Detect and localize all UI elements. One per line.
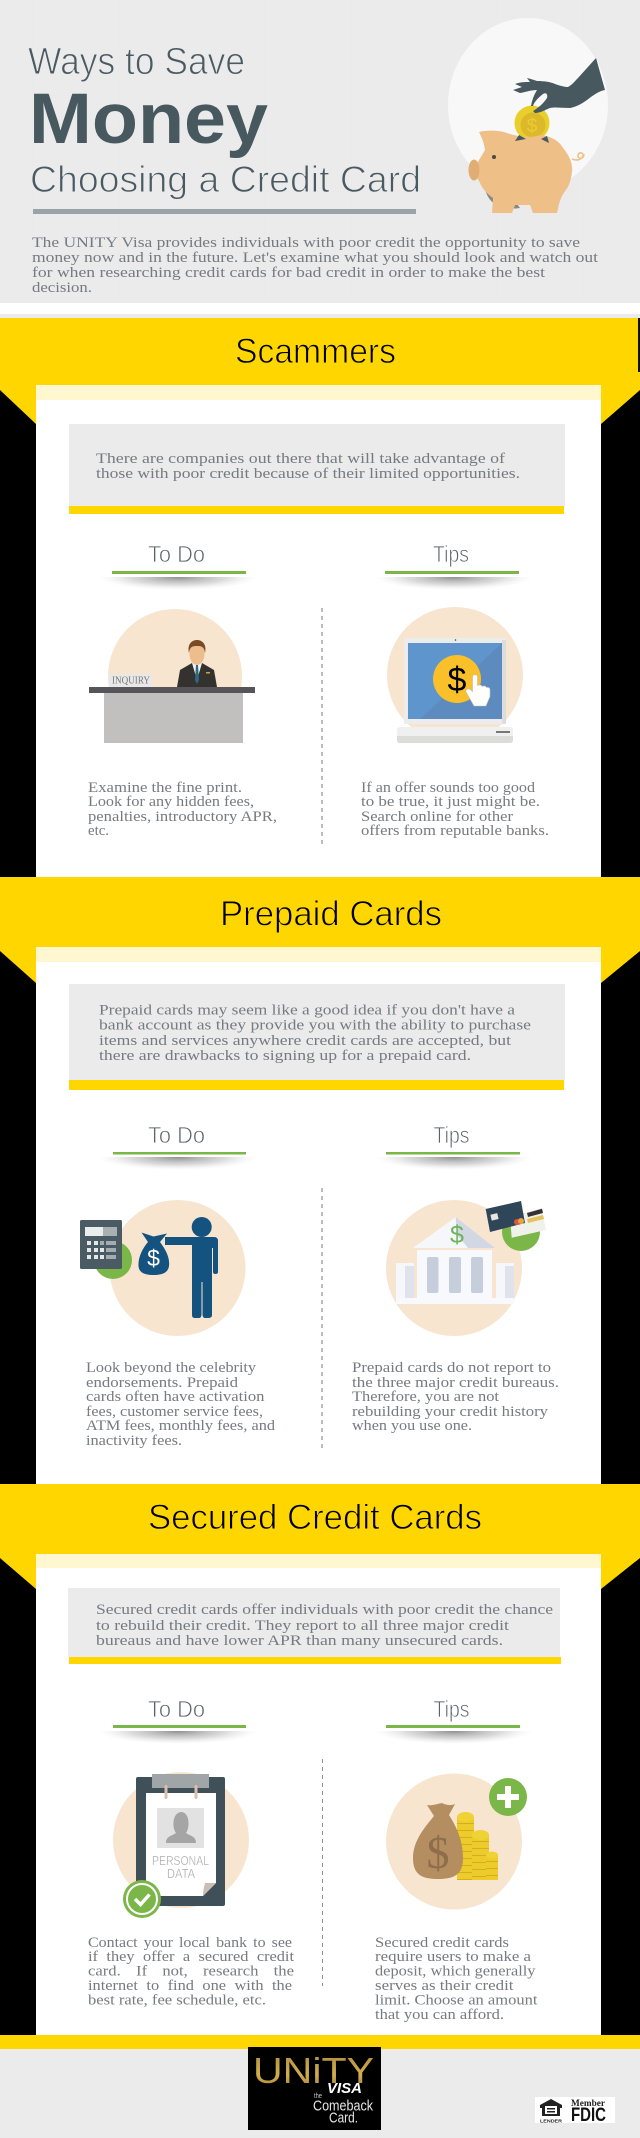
callout box [68, 1588, 561, 1664]
heading: To Do [98, 1696, 258, 1744]
section: Prepaid Cards [0, 877, 640, 1484]
icon: receptionist at inquiry desk: INQUIRY [112, 676, 150, 686]
callout box: There are companies out there that will take advantage of [96, 451, 505, 467]
text: To Do: card. If not, research the [88, 1964, 294, 1980]
title [28, 41, 421, 200]
text: Tips: serves as their credit [375, 1978, 514, 1994]
callout box: there are drawbacks to signing up for a prepaid card. [99, 1048, 471, 1064]
text: Tips [361, 780, 549, 839]
content card [36, 947, 601, 1484]
heading: Tips [375, 541, 533, 590]
text: To Do: endorsements. Prepaid [86, 1375, 239, 1391]
text: Tips: to be true, it just might be. [361, 794, 540, 810]
section: Secured Credit Cards [0, 1484, 640, 2035]
text: Tips: that you can afford. [375, 2007, 504, 2023]
callout box: to rebuild their credit. They report to all three major credit [96, 1618, 510, 1634]
icon: bank with credit cards: $ [450, 1221, 464, 1249]
header panel [0, 0, 640, 303]
callout box: Secured credit cards offer individuals with poor credit the chance [96, 1602, 553, 1618]
text: Tips: the three major credit bureaus. [352, 1375, 559, 1391]
text: To Do: internet to find one with the [88, 1978, 292, 1994]
text: Tips: Secured credit cards [375, 1935, 509, 1951]
text: To Do: if they offer a secured credit [88, 1949, 295, 1965]
heading: To Do: To Do [148, 541, 205, 567]
logo: equal housing lender and FDIC [535, 2097, 615, 2126]
text: To Do: fees, customer service fees, [86, 1404, 263, 1420]
text: To Do: Contact your local bank to see [88, 1935, 292, 1951]
text: To Do [88, 780, 277, 839]
icon: calculator and person holding money bag: $ [147, 1245, 160, 1271]
logo: equal housing lender and FDIC: LENDER [540, 2118, 563, 2124]
text: To Do: inactivity fees. [86, 1433, 182, 1449]
callout box: bureaus and have lower APR than many unsecured cards. [96, 1633, 503, 1649]
logo: equal housing lender and FDIC: FDIC [571, 2105, 606, 2126]
logo: UNITY Visa: the [314, 2093, 322, 2100]
text: Tips: Prepaid cards do not report to [352, 1360, 551, 1376]
text: To Do: Look beyond the celebrity [86, 1360, 257, 1376]
text: Tips: rebuilding your credit history [352, 1404, 549, 1420]
icon: laptop with dollar and cursor: $ [448, 661, 467, 699]
text: To Do: ATM fees, monthly fees, and [86, 1418, 276, 1434]
icon: money bag and coins: $ [426, 1827, 450, 1878]
heading: Tips [375, 1122, 533, 1170]
icon: clipboard with personal data [113, 1772, 249, 1918]
banner [0, 1484, 640, 1589]
intro text: The UNITY Visa provides individuals with poor credit the opportunity to save [32, 235, 580, 251]
icon: piggy bank with coin and hand [448, 18, 608, 213]
text: To Do: etc. [88, 823, 109, 839]
text: To Do: Examine the fine print. [88, 780, 242, 796]
heading: Scammers: Scammers [235, 332, 396, 371]
callout box [69, 984, 565, 1090]
title: Choosing a Credit Card [30, 159, 421, 200]
callout box: Prepaid cards may seem like a good idea if you don't have a [99, 1002, 515, 1018]
callout box: those with poor credit because of their limited opportunities. [96, 466, 520, 482]
icon: money bag and coins [386, 1774, 527, 1910]
title: Ways to Save [28, 41, 245, 83]
intro text [32, 235, 599, 296]
text: Tips: deposit, which generally [375, 1964, 536, 1980]
callout box: items and services anywhere credit cards are accepted, but [99, 1033, 512, 1049]
text: To Do [86, 1360, 276, 1449]
logo: UNITY Visa: UNiTY [253, 2050, 374, 2091]
icon: clipboard with personal data: DATA [167, 1866, 195, 1881]
logo: UNITY Visa: VISA [327, 2080, 362, 2097]
logo: UNITY Visa [248, 2047, 381, 2130]
heading: To Do: To Do [148, 1122, 205, 1148]
icon: clipboard with personal data: PERSONAL [152, 1853, 209, 1868]
title underline [33, 209, 416, 214]
heading: Tips [375, 1696, 533, 1744]
text: Tips: offers from reputable banks. [361, 823, 549, 839]
section: Scammers [0, 318, 640, 877]
heading: Tips: Tips [434, 1122, 470, 1148]
heading: Secured Credit Cards: Secured Credit Cards [148, 1498, 482, 1537]
text: Tips [375, 1935, 538, 2023]
heading: To Do [98, 541, 258, 590]
icon: bank with credit cards [386, 1200, 546, 1336]
text: To Do: penalties, introductory APR, [88, 809, 277, 825]
intro text: for when researching credit cards for bad credit in order to make the best [32, 265, 546, 281]
text: Tips: when you use one. [352, 1418, 472, 1434]
title: Money [29, 80, 269, 159]
heading: Prepaid Cards: Prepaid Cards [220, 894, 442, 934]
icon: calculator and person holding money bag [80, 1200, 246, 1336]
icon: receptionist at inquiry desk [89, 609, 255, 743]
callout box [69, 424, 565, 514]
icon: laptop with dollar and cursor [387, 607, 523, 743]
text: Tips: Search online for other [361, 809, 513, 825]
text: To Do: best rate, fee schedule, etc. [88, 1992, 266, 2008]
footer band [0, 2035, 640, 2049]
content card [36, 1554, 601, 2035]
logo: UNITY Visa: Comeback [313, 2098, 373, 2114]
heading: Tips: Tips [433, 541, 469, 567]
text: To Do: cards often have activation [86, 1389, 265, 1405]
intro text: money now and in the future. Let's examine what you should look and watch out [32, 250, 599, 266]
heading: Tips: Tips [434, 1696, 470, 1722]
text: Tips: limit. Choose an amount [375, 1992, 538, 2008]
intro text: decision. [32, 280, 92, 296]
banner [0, 318, 640, 424]
text: Tips [352, 1360, 559, 1434]
text: To Do: Look for any hidden fees, [88, 794, 254, 810]
text: To Do [88, 1935, 295, 2008]
icon: piggy bank with coin and hand: $ [527, 116, 538, 137]
logo: UNITY Visa: Card. [329, 2110, 358, 2126]
text: Tips: Therefore, you are not [352, 1389, 500, 1405]
callout box: bank account as they provide you with the ability to purchase [99, 1018, 531, 1034]
content card [36, 385, 601, 877]
logo: equal housing lender and FDIC: Member [571, 2099, 606, 2109]
banner [0, 877, 640, 983]
heading: To Do [98, 1122, 258, 1170]
heading: To Do: To Do [148, 1696, 205, 1722]
text: Tips: require users to make a [375, 1949, 531, 1965]
text: Tips: If an offer sounds too good [361, 780, 536, 796]
